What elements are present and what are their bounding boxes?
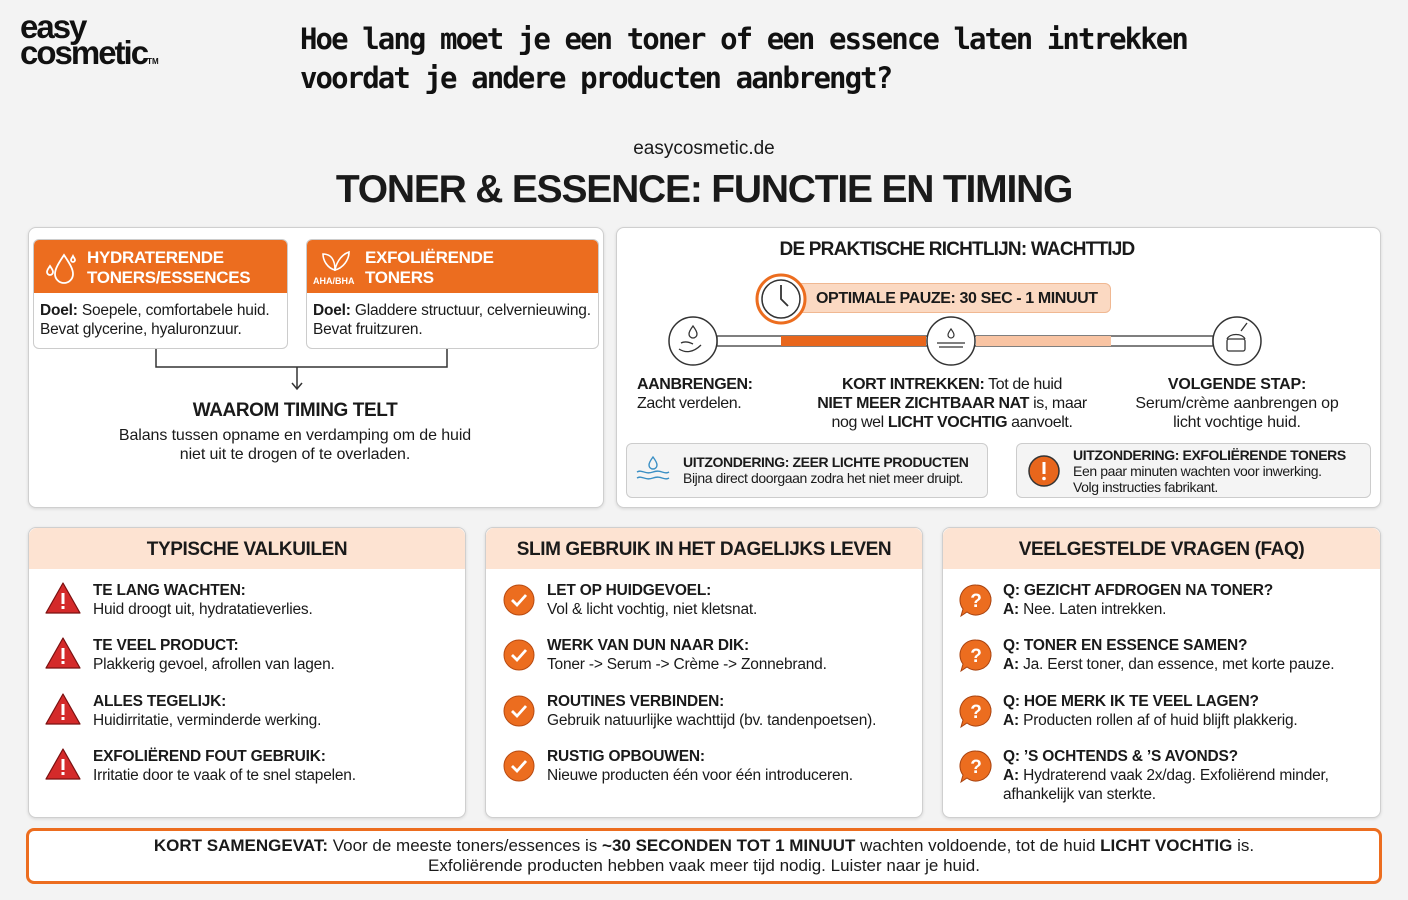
item 1: TE LANG WACHTEN:	[93, 582, 246, 599]
faq 3: A: Producten rollen af of huid blijft plakkerig.	[1003, 712, 1298, 729]
item 4: RUSTIG OPBOUWEN:	[547, 748, 705, 765]
main heading: TONER & ESSENCE: FUNCTIE EN TIMING	[336, 168, 1072, 211]
item 3	[504, 693, 876, 729]
card: hydraterende: Bevat glycerine, hyaluronzuur.	[40, 321, 242, 338]
text: balans	[119, 427, 471, 463]
step: volgende stap	[1135, 376, 1339, 431]
item 2: Plakkerig gevoel, afrollen van lagen.	[93, 656, 335, 673]
card: exfoliërende	[306, 239, 599, 349]
item 1	[45, 582, 313, 618]
faq 4: Q: ’S OCHTENDS & ’S AVONDS?	[1003, 748, 1238, 765]
logo	[20, 8, 159, 71]
callout: exfoliërende: Een paar minuten wachten voor inwerking.	[1073, 463, 1322, 479]
website: easycosmetic.de	[633, 138, 775, 159]
item 2: TE VEEL PRODUCT:	[93, 637, 239, 654]
panel: wachttijd	[616, 227, 1381, 508]
item 4: Irritatie door te vaak of te snel stapelen.	[93, 767, 356, 784]
item 2: WERK VAN DUN NAAR DIK:	[547, 637, 749, 654]
item 2: Toner -> Serum -> Crème -> Zonnebrand.	[547, 656, 827, 673]
faq 2: Q: TONER EN ESSENCE SAMEN?	[1003, 637, 1247, 654]
item 2	[504, 637, 827, 673]
card: exfoliërende: Bevat fruitzuren.	[313, 321, 422, 338]
item 3: Gebruik natuurlijke wachttijd (bv. tandenpoetsen).	[547, 712, 876, 729]
logo: cosmeticTM	[20, 34, 159, 71]
faq 2: A: Ja. Eerst toner, dan essence, met korte pauze.	[1003, 656, 1334, 673]
step: aanbrengen: Zacht verdelen.	[637, 395, 741, 412]
title: Hoe lang moet je een toner of een essence laten intrekken	[300, 22, 1187, 56]
item 1: Huid droogt uit, hydratatieverlies.	[93, 601, 313, 618]
callout: lichte producten: Bijna direct doorgaan zodra het niet meer druipt.	[683, 470, 963, 486]
item 3: ALLES TEGELIJK:	[93, 693, 226, 710]
step: volgende stap: VOLGENDE STAP:	[1168, 376, 1306, 393]
header	[29, 528, 465, 569]
title	[300, 22, 1187, 95]
callout: lichte producten: UITZONDERING: ZEER LICHTE PRODUCTEN	[683, 454, 968, 470]
logo: easy	[20, 8, 85, 45]
faq 4: afhankelijk van sterkte.	[1003, 786, 1156, 803]
timeline	[668, 316, 1262, 366]
icon: warning	[1028, 455, 1060, 487]
card: exfoliërende: AHA/BHA	[313, 276, 354, 286]
faq 4	[959, 748, 1329, 803]
faq 3	[960, 693, 1298, 729]
faq 1: ?	[970, 591, 982, 612]
heading: waarom timing telt: WAAROM TIMING TELT	[193, 400, 397, 421]
header: TYPISCHE VALKUILEN	[147, 539, 347, 560]
faq 1: A: Nee. Laten intrekken.	[1003, 601, 1166, 618]
item 4	[504, 748, 853, 784]
faq 3: Q: HOE MERK IK TE VEEL LAGEN?	[1003, 693, 1259, 710]
panel: faq	[942, 527, 1381, 818]
item 2	[45, 637, 335, 673]
faq 2: ?	[970, 646, 982, 667]
icon: drops	[46, 254, 76, 284]
item 4: Nieuwe producten één voor één introduceren.	[547, 767, 853, 784]
callout: exfoliërende	[1016, 443, 1371, 498]
step: kort intrekken: nog wel LICHT VOCHTIG aanvoelt.	[831, 414, 1073, 431]
card: exfoliërende: TONERS	[365, 268, 434, 287]
item 1: LET OP HUIDGEVOEL:	[547, 582, 711, 599]
faq 1: Q: GEZICHT AFDROGEN NA TONER?	[1003, 582, 1273, 599]
step: volgende stap: licht vochtige huid.	[1173, 414, 1301, 431]
text: balans: niet uit te drogen of te overladen.	[180, 446, 410, 463]
faq 2	[960, 637, 1334, 673]
icon: leaf	[322, 250, 350, 272]
step: kort intrekken	[817, 376, 1087, 431]
icon: clock	[756, 274, 806, 324]
item 3: Huidirritatie, verminderde werking.	[93, 712, 321, 729]
title: voordat je andere producten aanbrengt?	[300, 61, 891, 95]
callout: exfoliërende: UITZONDERING: EXFOLIËRENDE TONERS	[1073, 447, 1346, 463]
card: hydraterende: HYDRATERENDE	[87, 248, 224, 267]
item 1	[504, 582, 757, 618]
summary box: Exfoliërende producten hebben vaak meer tijd nodig. Luister naar je huid.	[428, 856, 980, 875]
text: balans: Balans tussen opname en verdamping om de huid	[119, 427, 471, 444]
panel: toner types	[28, 227, 604, 508]
summary box: KORT SAMENGEVAT: Voor de meeste toners/essences is ~30 SECONDEN TOT 1 MINUUT wachten voldoende, tot de huid LICHT VOCHTIG is.	[154, 836, 1254, 855]
faq 4: ?	[970, 757, 982, 778]
summary box	[26, 828, 1382, 884]
step: aanbrengen: AANBRENGEN:	[637, 376, 753, 393]
icon: water	[636, 456, 670, 480]
step: kort intrekken: NIET MEER ZICHTBAAR NAT is, maar	[817, 395, 1087, 412]
step: aanbrengen	[637, 376, 753, 412]
item 3	[45, 693, 321, 729]
callout: lichte producten	[626, 443, 988, 498]
heading: DE PRAKTISCHE RICHTLIJN: WACHTTIJD	[780, 239, 1134, 260]
item 1: Vol & licht vochtig, niet kletsnat.	[547, 601, 757, 618]
item 4: EXFOLIËREND FOUT GEBRUIK:	[93, 748, 326, 765]
connector arrow	[155, 349, 448, 390]
faq 4: A: Hydraterend vaak 2x/dag. Exfoliërend minder,	[1003, 767, 1329, 784]
faq 1	[960, 582, 1273, 618]
header: VEELGESTELDE VRAGEN (FAQ)	[1019, 539, 1304, 560]
card: hydraterende: TONERS/ESSENCES	[87, 268, 250, 287]
step: kort intrekken: KORT INTREKKEN: Tot de huid	[842, 376, 1062, 393]
card: exfoliërende: EXFOLIËRENDE	[365, 248, 494, 267]
item 3: ROUTINES VERBINDEN:	[547, 693, 724, 710]
pill: optimale pauze: OPTIMALE PAUZE: 30 SEC - 1 MINUUT	[816, 290, 1098, 307]
panel: valkuilen	[28, 527, 466, 818]
panel: slim gebruik	[485, 527, 923, 818]
card: hydraterende: Doel: Soepele, comfortabele huid.	[40, 302, 270, 319]
card: hydraterende	[33, 239, 288, 349]
faq 3: ?	[970, 702, 982, 723]
callout: exfoliërende: Volg instructies fabrikant.	[1073, 479, 1218, 495]
header	[943, 528, 1380, 569]
item 4	[45, 748, 356, 784]
step: volgende stap: Serum/crème aanbrengen op	[1135, 395, 1339, 412]
pill: optimale pauze	[767, 283, 1111, 313]
header: SLIM GEBRUIK IN HET DAGELIJKS LEVEN	[517, 539, 891, 560]
card: exfoliërende: Doel: Gladdere structuur, celvernieuwing.	[313, 302, 591, 319]
header	[486, 528, 922, 569]
